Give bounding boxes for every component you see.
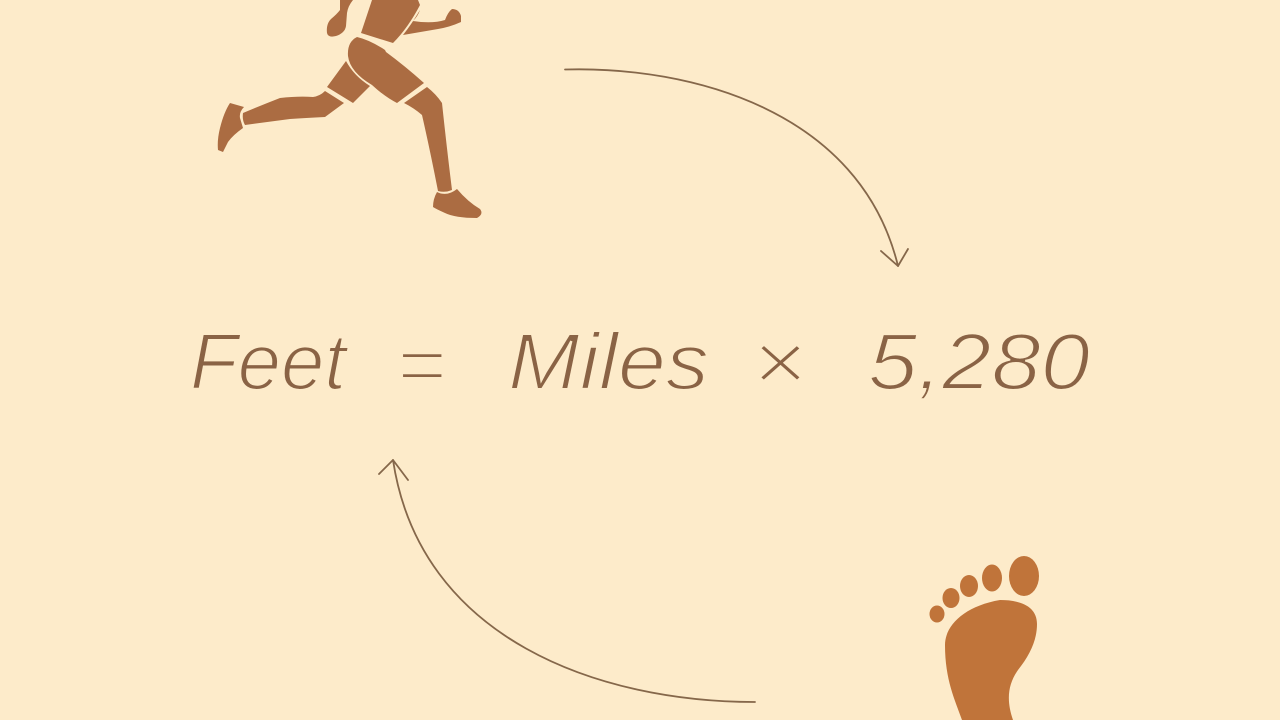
arrow: bottom curve	[379, 460, 755, 702]
term: Feet: Feet	[190, 317, 349, 406]
icon: running figure	[218, 0, 481, 218]
term: Miles: Miles	[508, 317, 709, 406]
formula	[190, 315, 1090, 409]
operator: equals: =	[396, 320, 446, 409]
arrow: top curve	[565, 69, 908, 266]
operator: times: ×	[751, 315, 807, 409]
value: 5,280: 5,280	[868, 317, 1090, 406]
icon: footprint	[930, 556, 1039, 720]
